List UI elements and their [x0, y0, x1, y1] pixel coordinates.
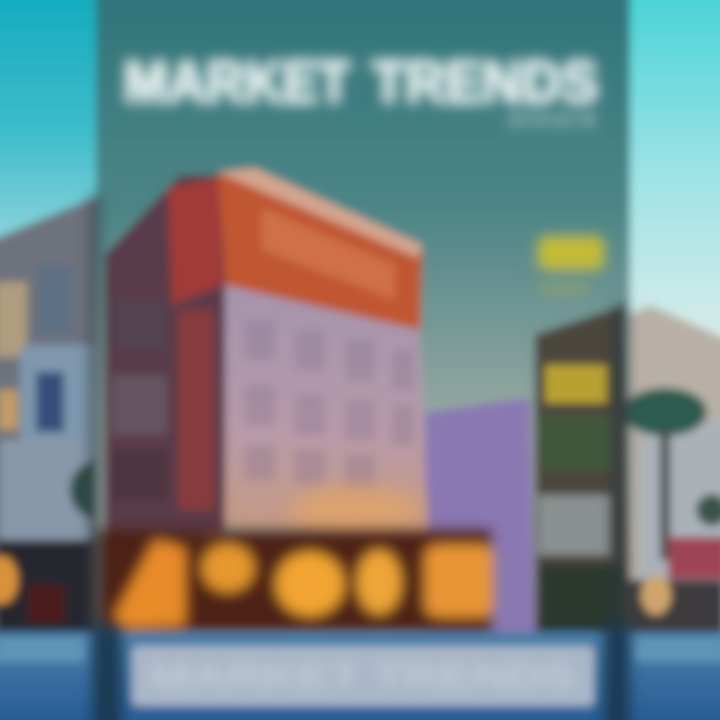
panel edge shadows: [88, 195, 628, 720]
right side dark building with signs: [535, 305, 630, 640]
building left side: [105, 175, 225, 545]
building roof sign: [218, 170, 422, 330]
bottom caption text: MARKET TRENDS: [150, 658, 575, 696]
side band highlights: [0, 638, 720, 662]
title text: [124, 50, 598, 130]
title text: TRENDS: [372, 50, 598, 115]
building facade: [225, 285, 428, 535]
title text: 2024: [505, 110, 597, 130]
left street buildings: [0, 195, 130, 650]
sky right: [620, 0, 720, 380]
main building: [105, 168, 428, 545]
bottom band: [0, 632, 720, 720]
central poster panel: [96, 0, 630, 640]
title text: MARKET: [124, 50, 350, 115]
sky left: [0, 0, 105, 280]
storefront row: [96, 530, 493, 634]
bottom panel columns: [92, 625, 630, 720]
glow above storefronts: [290, 486, 420, 534]
yellow sign on panel: [538, 236, 604, 270]
bottom caption bar: [132, 646, 594, 706]
right side trees and shops: [623, 388, 720, 635]
purple background building: [425, 398, 535, 640]
window grid: [245, 320, 414, 490]
right street buildings: [625, 305, 720, 640]
